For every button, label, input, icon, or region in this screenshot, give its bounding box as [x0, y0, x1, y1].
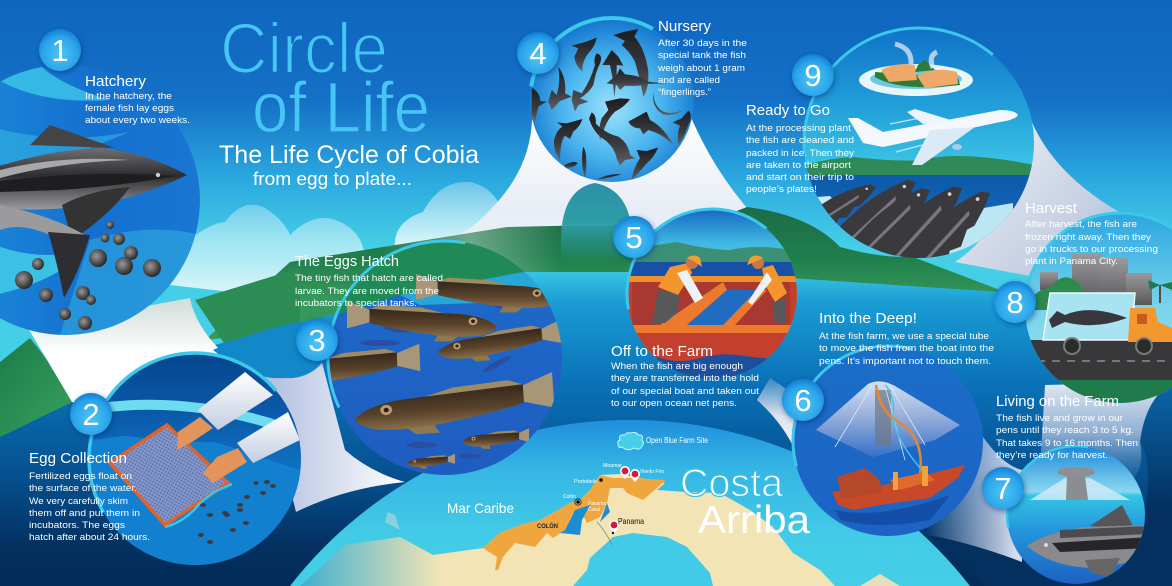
text: nursery: “fingerlings.”	[658, 87, 711, 98]
text: into the deep: to move the fish from the boat into the	[819, 343, 994, 354]
panel 3: the eggs hatch circle	[326, 240, 562, 475]
panel 6: into the deep circle	[792, 344, 983, 536]
fish tank	[687, 290, 757, 325]
panel 4: nursery circle	[529, 16, 694, 182]
net lines	[835, 386, 925, 460]
text: off to the farm: Off to the Farm	[611, 344, 713, 360]
circle fill	[0, 65, 200, 335]
verge	[1020, 380, 1172, 405]
title: of Life	[252, 69, 430, 148]
badge 6	[782, 379, 824, 421]
badge 8: 8	[1006, 285, 1024, 320]
palm trees	[1148, 280, 1172, 303]
speed lines	[890, 117, 930, 152]
net cone	[1030, 478, 1130, 500]
text: living on the farm: The fish live and grow in our	[996, 413, 1124, 424]
text: egg collection: Egg Collection	[29, 451, 127, 467]
canal lakes	[560, 503, 610, 535]
badge 8	[994, 281, 1036, 323]
badge 3	[296, 319, 338, 361]
text: ready to go	[746, 103, 854, 195]
panel 7: living on the farm circle	[996, 435, 1156, 586]
cobia fish	[1090, 505, 1135, 530]
text: harvest: plant in Panama City.	[1025, 256, 1118, 267]
text: the eggs hatch: The tiny fish that hatch are called	[295, 273, 443, 284]
badge 5	[613, 216, 655, 258]
map labels: COLÓN	[537, 521, 558, 530]
worker right	[747, 256, 787, 323]
truck fish	[1049, 310, 1127, 328]
hills	[635, 242, 792, 264]
hand lower	[203, 448, 247, 483]
clouds	[170, 182, 540, 300]
text: living on the farm: they’re ready for harvest.	[996, 450, 1108, 461]
water bottom	[654, 354, 768, 379]
badge 9	[792, 54, 834, 96]
map labels: Panama	[618, 517, 644, 526]
dark band	[625, 262, 800, 276]
text: harvest	[1025, 201, 1158, 267]
sleeve lower	[237, 412, 300, 463]
text: egg collection: them off and put them in	[29, 508, 140, 519]
ice	[923, 203, 1013, 259]
text: ready to go: At the processing plant	[746, 123, 851, 134]
funnel 2 to 3	[262, 355, 405, 512]
text: harvest: frozen right away. Then they	[1025, 232, 1151, 243]
funnel around nursery	[440, 115, 770, 246]
badge 9: 9	[804, 58, 822, 93]
text: off to the farm: When the fish are big enough	[611, 361, 743, 372]
text: nursery: weigh about 1 gram	[657, 63, 745, 74]
water ripples	[835, 495, 950, 525]
pillar	[1066, 476, 1088, 500]
text: off to the farm: they are transferred into the hold	[611, 373, 759, 384]
eggs	[15, 221, 161, 330]
steam	[895, 44, 937, 68]
text: hatchery: female fish lay eggs	[85, 103, 174, 114]
circle fill	[89, 353, 301, 565]
text: ready to go: Ready to Go	[746, 103, 830, 119]
text: living on the farm	[996, 394, 1138, 461]
fish group	[330, 274, 561, 469]
text: hatchery	[85, 74, 190, 126]
deep water right	[918, 385, 1172, 586]
town dots	[576, 478, 614, 534]
light water bands	[0, 65, 200, 335]
funnel 5 to 6	[757, 378, 812, 455]
map labels: Colón	[563, 494, 576, 500]
map labels: Costa	[680, 462, 783, 505]
text: hatchery: Hatchery	[85, 74, 147, 90]
truck box	[1043, 293, 1135, 340]
hills	[805, 156, 1034, 175]
centre pillar	[875, 390, 891, 445]
tubes	[876, 385, 921, 475]
truck cab	[1128, 308, 1172, 342]
teal stem under nursery	[561, 183, 632, 262]
hand upper	[177, 417, 213, 450]
map: globe with Panama	[290, 420, 970, 586]
larva shadows	[360, 306, 511, 458]
badge 4: 4	[529, 36, 547, 71]
eggs on water	[192, 480, 276, 544]
text: into the deep	[819, 311, 994, 367]
plate of food	[859, 60, 973, 96]
subtitle: The Life Cycle of Cobia	[219, 141, 479, 169]
text: nursery: After 30 days in the	[658, 38, 747, 49]
fingerling fish	[532, 29, 691, 180]
text: the eggs hatch: incubators to special tanks.	[295, 298, 417, 309]
funnel 8 to 7	[1040, 382, 1172, 482]
text: off to the farm: of our special boat and taken out	[611, 386, 759, 397]
text: nursery: and are called	[658, 75, 720, 86]
badge 6: 6	[794, 383, 812, 418]
pin: Panama	[609, 520, 619, 534]
funnel 9 to 8	[955, 95, 1130, 276]
blue blob between 2 and 3	[213, 322, 335, 378]
text: nursery: special tank the fish	[658, 50, 746, 61]
text: into the deep: At the fish farm, we use a special tube	[819, 331, 989, 342]
river	[597, 522, 612, 545]
water in net	[165, 484, 232, 527]
map labels: Mar Caribe	[447, 500, 514, 516]
text: harvest: After harvest, the fish are	[1025, 219, 1137, 230]
text: nursery: Nursery	[658, 19, 712, 35]
title	[220, 10, 430, 148]
subtitle: from egg to plate...	[253, 169, 412, 189]
text: harvest: go in trucks to our processing	[1025, 244, 1158, 255]
boat cabin	[837, 468, 882, 499]
text: off to the farm: to our open ocean net pens.	[611, 398, 737, 409]
text: egg collection: the surface of the water.	[29, 483, 137, 494]
harvested fish	[796, 175, 1012, 294]
airplane	[848, 109, 1018, 165]
text: hatchery: about every two weeks.	[85, 115, 190, 126]
worker left	[652, 256, 703, 323]
panel 9: ready to go circle	[794, 18, 1044, 294]
subtitle	[219, 141, 479, 189]
panel 1: hatchery circle	[0, 65, 200, 335]
map labels: Portobelo	[574, 479, 597, 485]
globe ocean	[290, 420, 970, 586]
road	[1020, 340, 1172, 382]
orange Colon region	[483, 475, 666, 570]
panel 5: off to the farm circle	[626, 208, 797, 379]
badge 7: 7	[994, 471, 1012, 506]
text: egg collection: We very carefully skim	[29, 496, 128, 507]
text: living on the farm: Living on the Farm	[996, 394, 1119, 410]
text: living on the farm: That takes 9 to 16 months. Then	[996, 438, 1138, 449]
buildings	[1040, 254, 1152, 305]
text: nursery	[657, 19, 747, 98]
pin: Miramar	[620, 466, 630, 479]
badge 4	[517, 32, 559, 74]
badge 2: 2	[82, 397, 100, 432]
map labels: Viento Frio	[640, 469, 664, 475]
text: ready to go: people’s plates!	[746, 184, 817, 195]
map labels: Panama	[588, 501, 606, 507]
net frame	[110, 425, 228, 525]
text: the eggs hatch	[295, 254, 443, 309]
net pen cone	[816, 381, 960, 457]
badge 3: 3	[308, 323, 326, 358]
text: the eggs hatch: The Eggs Hatch	[295, 254, 399, 270]
text: ready to go: are taken to the airport	[746, 160, 851, 171]
cobia fish	[0, 125, 187, 298]
badge 1	[39, 29, 81, 71]
text: egg collection: hatch after about 24 hours.	[29, 532, 150, 543]
text: off to the farm	[611, 344, 759, 409]
text: egg collection	[29, 451, 150, 543]
green hills band	[0, 207, 1172, 440]
text: the eggs hatch: larvae. They are moved from the	[295, 286, 439, 297]
bushes	[1030, 277, 1095, 310]
ocean water	[0, 272, 1172, 586]
text: into the deep: pens. It’s important not to touch them.	[819, 356, 991, 367]
map labels: Arriba	[698, 499, 810, 542]
land mass	[300, 474, 900, 586]
map labels: Canal	[588, 507, 600, 513]
deck inside	[632, 282, 790, 325]
map labels: Open Blue Farm Site	[646, 436, 708, 445]
sleeve upper	[198, 372, 273, 430]
text: hatchery: In the hatchery, the	[85, 91, 172, 102]
text: ready to go: packed in ice. Then they	[746, 148, 854, 159]
crew	[893, 466, 928, 490]
boat hull	[625, 276, 800, 366]
water ring surface	[100, 405, 285, 428]
text: harvest: Harvest	[1025, 201, 1077, 217]
badge 7	[982, 467, 1024, 509]
text: ready to go: and start on their trip to	[746, 172, 854, 183]
map labels: Miramar	[603, 463, 622, 469]
text: into the deep: Into the Deep!	[819, 311, 917, 327]
text: egg collection: incubators. The eggs	[29, 520, 125, 531]
text: ready to go: the fish are cleaned and	[746, 135, 854, 146]
map labels	[447, 436, 810, 542]
badge 2	[70, 393, 112, 435]
funnel 1 to 2	[28, 298, 222, 420]
title: Circle	[220, 10, 388, 89]
funnel 7 to 6	[918, 425, 1022, 562]
badge 1: 1	[51, 33, 69, 68]
pin: Viento Frio	[630, 469, 640, 482]
wave water	[90, 436, 300, 570]
text: egg collection: Fertilized eggs float on	[29, 471, 132, 482]
wheels	[1064, 338, 1152, 354]
farm site icon	[618, 432, 644, 450]
boat hull	[832, 465, 965, 510]
panel 2: egg collection circle	[87, 351, 301, 565]
hill and sky in circle	[338, 242, 524, 314]
beams	[660, 282, 767, 325]
deck hold	[890, 472, 935, 490]
text: living on the farm: pens until they reach 3 to 5 kg.	[996, 425, 1134, 436]
panel 8: harvest circle	[1010, 198, 1172, 418]
badge 5: 5	[625, 220, 643, 255]
